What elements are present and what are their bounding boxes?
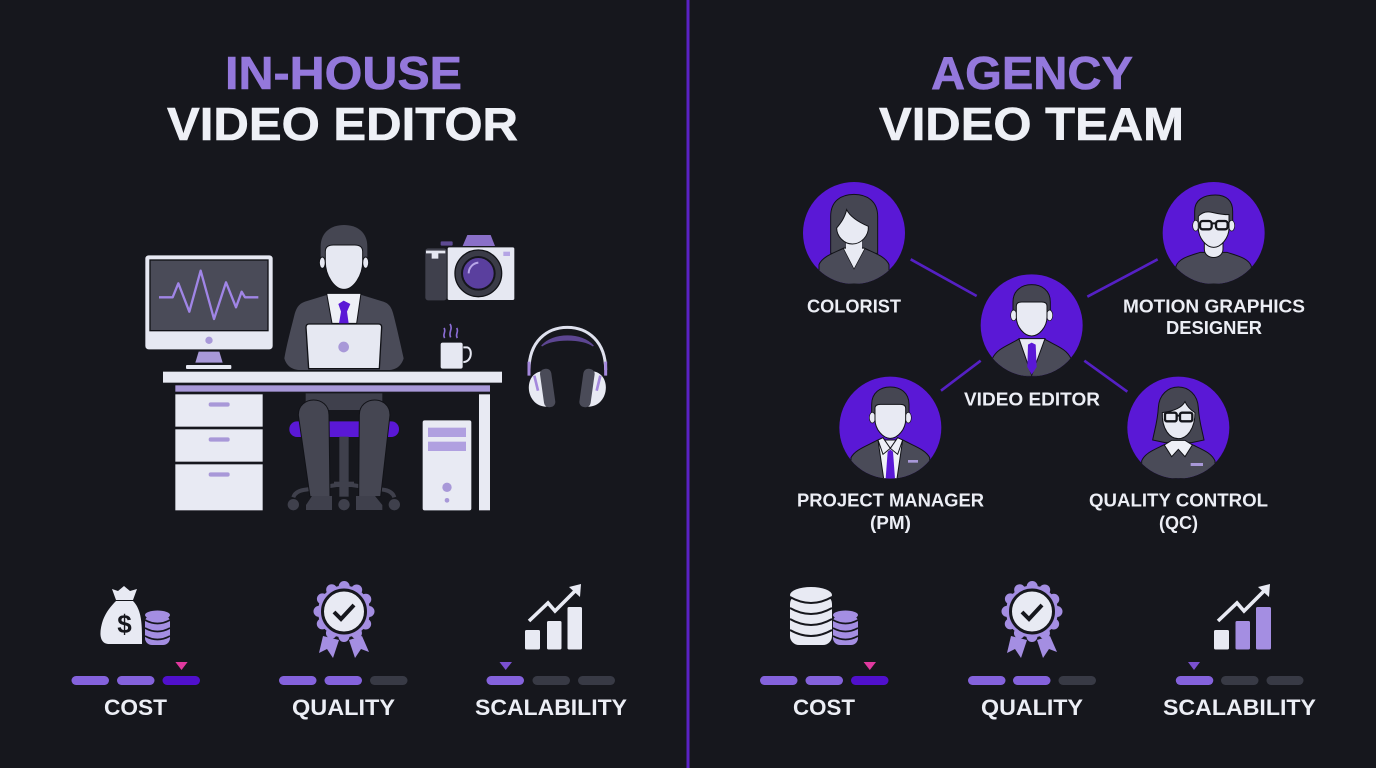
score bar: scalability	[1176, 662, 1304, 685]
role labels: QUALITY CONTROL	[1089, 490, 1268, 510]
avatar: colorist	[803, 182, 905, 284]
role labels: DESIGNER	[1166, 318, 1262, 338]
icon: growth chart	[525, 584, 582, 650]
icon: desk	[163, 372, 502, 510]
avatar: motion graphics designer	[1163, 182, 1265, 284]
score bar: quality	[279, 676, 408, 685]
label: scalability: SCALABILITY	[1163, 695, 1316, 720]
icon: computer tower	[423, 420, 471, 510]
metric: scalability	[475, 584, 627, 720]
metric: quality	[968, 586, 1096, 720]
score bar: scalability	[486, 662, 615, 685]
icon: headphones	[529, 327, 606, 408]
icon: award badge	[1006, 586, 1058, 658]
score bar: quality	[968, 676, 1096, 685]
icon: monitor	[145, 255, 273, 369]
panel: in-house video editor	[72, 47, 627, 720]
label: cost: COST	[104, 695, 167, 720]
role labels: (PM)	[870, 513, 911, 533]
metric: cost	[72, 586, 200, 720]
icon: office chair	[288, 421, 400, 510]
team diagram	[803, 182, 1265, 479]
metric: cost	[760, 587, 888, 720]
avatar: quality control	[1127, 377, 1229, 479]
label: quality: QUALITY	[981, 695, 1083, 720]
icon: laptop	[306, 324, 382, 369]
role labels: VIDEO EDITOR	[964, 390, 1100, 410]
label: cost: COST	[793, 695, 855, 720]
title: in-house video editor: VIDEO EDITOR	[167, 98, 518, 150]
icon: coffee mug	[441, 324, 471, 369]
illustration: editor at desk	[145, 225, 606, 510]
score bar: cost	[760, 662, 888, 685]
role labels: (QC)	[1159, 513, 1198, 533]
label: quality: QUALITY	[292, 695, 395, 720]
figure: seated editor	[284, 225, 404, 510]
title: in-house video editor: IN-HOUSE	[225, 47, 462, 99]
icon: growth chart	[1214, 584, 1271, 650]
role labels	[797, 296, 1305, 533]
metric: scalability	[1163, 584, 1316, 720]
title: agency video team	[879, 47, 1184, 150]
role labels: PROJECT MANAGER	[797, 490, 984, 510]
icon: camera	[425, 235, 514, 300]
icon: award badge	[318, 586, 370, 658]
title: agency video team: AGENCY	[931, 47, 1133, 99]
icon: coin stacks	[790, 587, 858, 645]
connector lines	[911, 259, 1158, 392]
avatar: video editor	[981, 274, 1083, 376]
label: scalability: SCALABILITY	[475, 695, 627, 720]
center divider	[686, 0, 690, 768]
title: in-house video editor	[167, 47, 518, 150]
score bar: cost	[72, 662, 200, 685]
icon: money bag: $	[117, 609, 132, 639]
avatar: project manager	[839, 377, 941, 479]
role labels: MOTION GRAPHICS	[1123, 296, 1305, 316]
title: agency video team: VIDEO TEAM	[879, 98, 1184, 150]
role labels: COLORIST	[807, 296, 901, 316]
panel: agency video team	[760, 47, 1316, 720]
metric: quality	[279, 586, 408, 720]
